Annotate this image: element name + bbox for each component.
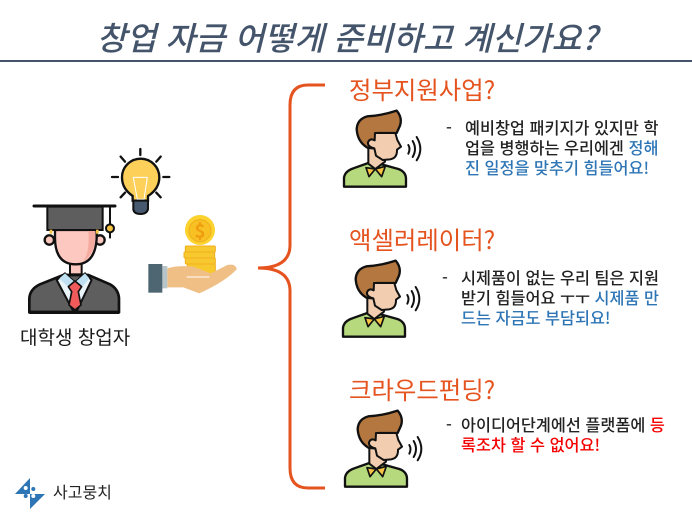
icon: hand holding coins (148, 215, 237, 293)
text block 2 (461, 265, 659, 329)
text block 1: 예비창업 패키지가 있지만 학 (465, 114, 658, 138)
text block 2: 시제품이 없는 우리 팀은 지원 (461, 265, 659, 289)
text block 3: 아이디어단계에선 플랫폼에 등 (461, 412, 665, 436)
text block 2: 받기 힘들어요 ㅜㅜ 시제품 만 (461, 285, 659, 309)
text block 1 (465, 114, 658, 178)
heading: accelerator: 액셀러레이터? (349, 222, 495, 257)
coin dollar sign: $ (194, 217, 206, 244)
dash 2: - (442, 265, 448, 289)
icon: person speaking 2 (343, 261, 419, 337)
text block 3 (461, 412, 665, 456)
title: 창업 자금 어떻게 준비하고 계신가요? (97, 13, 597, 60)
text block 1: 진 일정을 맞추기 힘들어요! (465, 154, 649, 178)
icon: graduate (29, 206, 119, 312)
heading: crowdfunding: 크라우드펀딩? (349, 372, 495, 407)
icon: light bulb (112, 149, 169, 214)
icon: person speaking 3 (345, 411, 421, 487)
text block 2: 드는 자금도 부담되요! (461, 305, 611, 329)
dash 1: - (446, 114, 452, 138)
bracket (258, 85, 325, 488)
label: student founder: 대학생 창업자 (20, 323, 130, 350)
title underline (0, 60, 692, 62)
text block 3: 록조차 할 수 없어요! (461, 432, 600, 456)
dash 3: - (446, 412, 452, 436)
text block 1: 업을 병행하는 우리에겐 정해 (465, 134, 658, 158)
icon: logo (15, 478, 45, 509)
heading: government support: 정부지원사업? (349, 72, 495, 107)
logo text: 사고뭉치 (53, 479, 112, 503)
icon: person speaking 1 (344, 111, 420, 187)
